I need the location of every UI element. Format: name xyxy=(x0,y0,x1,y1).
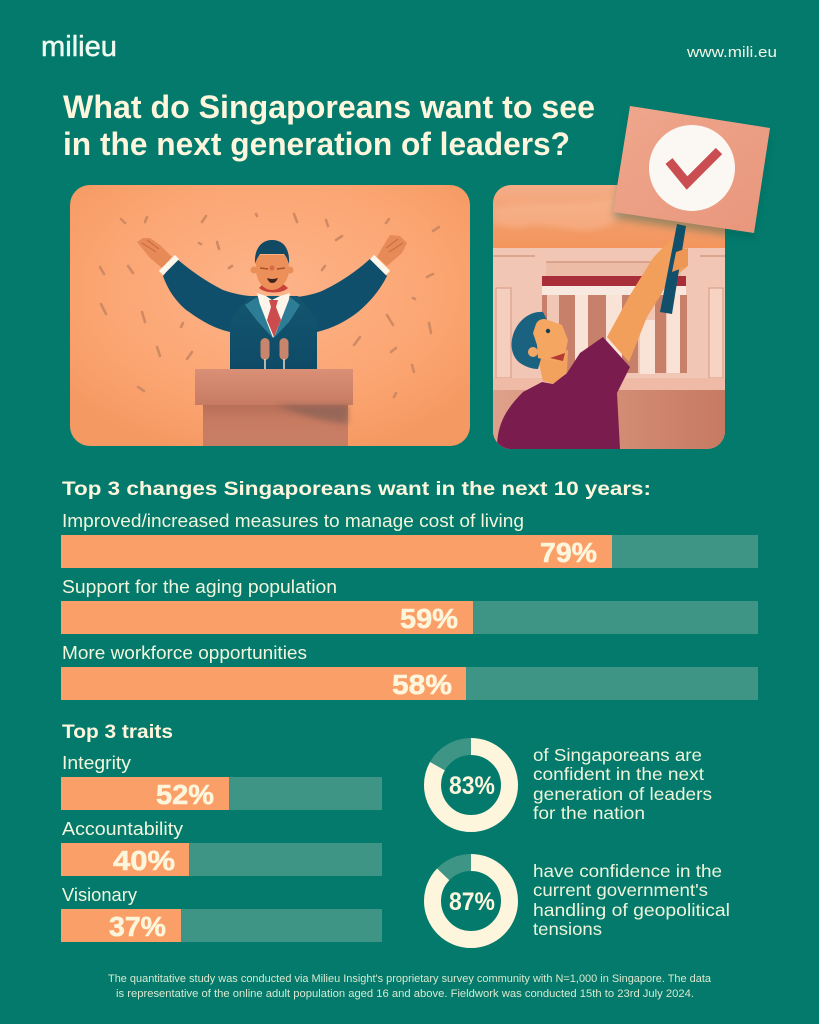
title: What do Singaporeans want to see xyxy=(63,89,595,125)
bar: accountability 40%: Accountability xyxy=(62,819,183,839)
bar: integrity 52%: 52% xyxy=(156,779,214,810)
fingers xyxy=(672,248,688,272)
arm xyxy=(607,240,688,362)
microphones xyxy=(260,338,288,369)
collar xyxy=(257,293,290,338)
heading: top 3 changes: Top 3 changes Singaporeans want in the next 10 years: xyxy=(62,478,651,500)
bar: cost of living 79%: 79% xyxy=(540,537,597,568)
website url: www.mili.eu xyxy=(686,44,777,61)
cuffs xyxy=(161,257,388,273)
bar: accountability 40%: 40% xyxy=(113,845,175,876)
mouth xyxy=(550,353,565,361)
title: in the next generation of leaders? xyxy=(63,126,570,162)
footer methodology note: is representative of the online adult population aged 16 and above. Fieldwork was conducted 15th to 23rd July 2024. xyxy=(116,988,694,1000)
bar: visionary 37%: 37% xyxy=(109,911,166,942)
bar: workforce 58%: More workforce opportunities xyxy=(62,643,307,663)
logo: milieu: milieu xyxy=(41,31,117,63)
text: 87% description: current government's xyxy=(533,880,708,900)
text: 83% description: generation of leaders xyxy=(533,784,712,804)
donut: 87% confidence: 87% xyxy=(449,888,495,916)
bar: visionary 37% xyxy=(61,885,382,942)
red band xyxy=(542,276,686,286)
bar: workforce 58% xyxy=(61,643,758,700)
side panels xyxy=(496,288,511,378)
lapels xyxy=(245,297,300,338)
text: 83% description: of Singaporeans are xyxy=(533,745,702,765)
hands xyxy=(137,235,407,268)
sky xyxy=(493,185,725,255)
text: 87% description xyxy=(533,861,730,939)
ear xyxy=(528,347,538,357)
bar: aging population 59% xyxy=(61,577,758,634)
sign xyxy=(613,106,770,233)
bar: cost of living 79% xyxy=(61,511,758,568)
illustration: man holding sign xyxy=(493,106,770,449)
donut: 83% confident: 83% xyxy=(449,772,495,800)
heading: top 3 traits: Top 3 traits xyxy=(62,721,173,743)
torso xyxy=(230,296,317,369)
right arm xyxy=(288,258,387,340)
face xyxy=(533,319,568,362)
columns xyxy=(542,295,687,373)
confetti xyxy=(100,214,439,397)
donut: 87% confidence xyxy=(432,862,510,940)
text: 83% description xyxy=(533,745,712,823)
bar: cost of living 79%: Improved/increased measures to manage cost of living xyxy=(62,511,524,531)
footer methodology note xyxy=(108,973,711,1000)
bar: aging population 59%: 59% xyxy=(400,603,458,634)
donut: 83% confident xyxy=(432,746,510,824)
pole xyxy=(660,224,686,314)
text: 83% description: confident in the next xyxy=(533,764,704,784)
sign shadow xyxy=(613,112,770,239)
check circle xyxy=(649,125,735,211)
text: 83% description: for the nation xyxy=(533,803,645,823)
text: 87% description: tensions xyxy=(533,919,602,939)
head xyxy=(250,240,294,292)
bar: aging population 59%: Support for the aging population xyxy=(62,577,337,597)
left arm xyxy=(163,259,262,340)
bar: integrity 52%: Integrity xyxy=(62,753,131,773)
shirt xyxy=(497,337,630,449)
podium xyxy=(203,405,348,446)
bar: visionary 37%: Visionary xyxy=(62,885,137,905)
illustration: politician at podium xyxy=(70,185,470,446)
bar: accountability 40% xyxy=(61,819,382,876)
bar: workforce 58%: 58% xyxy=(392,669,452,700)
building xyxy=(493,248,725,390)
text: 87% description: have confidence in the xyxy=(533,861,722,881)
footer methodology note: The quantitative study was conducted via Milieu Insight's proprietary survey community with N=1,000 in Singapore. The data xyxy=(108,973,711,985)
plaza xyxy=(493,378,725,449)
tie xyxy=(267,300,281,337)
check mark xyxy=(669,151,719,183)
hair xyxy=(512,312,548,369)
text: 87% description: handling of geopolitical xyxy=(533,900,730,920)
title xyxy=(63,89,595,162)
bar: integrity 52% xyxy=(61,753,382,810)
eye xyxy=(546,329,550,333)
neck xyxy=(537,350,568,384)
